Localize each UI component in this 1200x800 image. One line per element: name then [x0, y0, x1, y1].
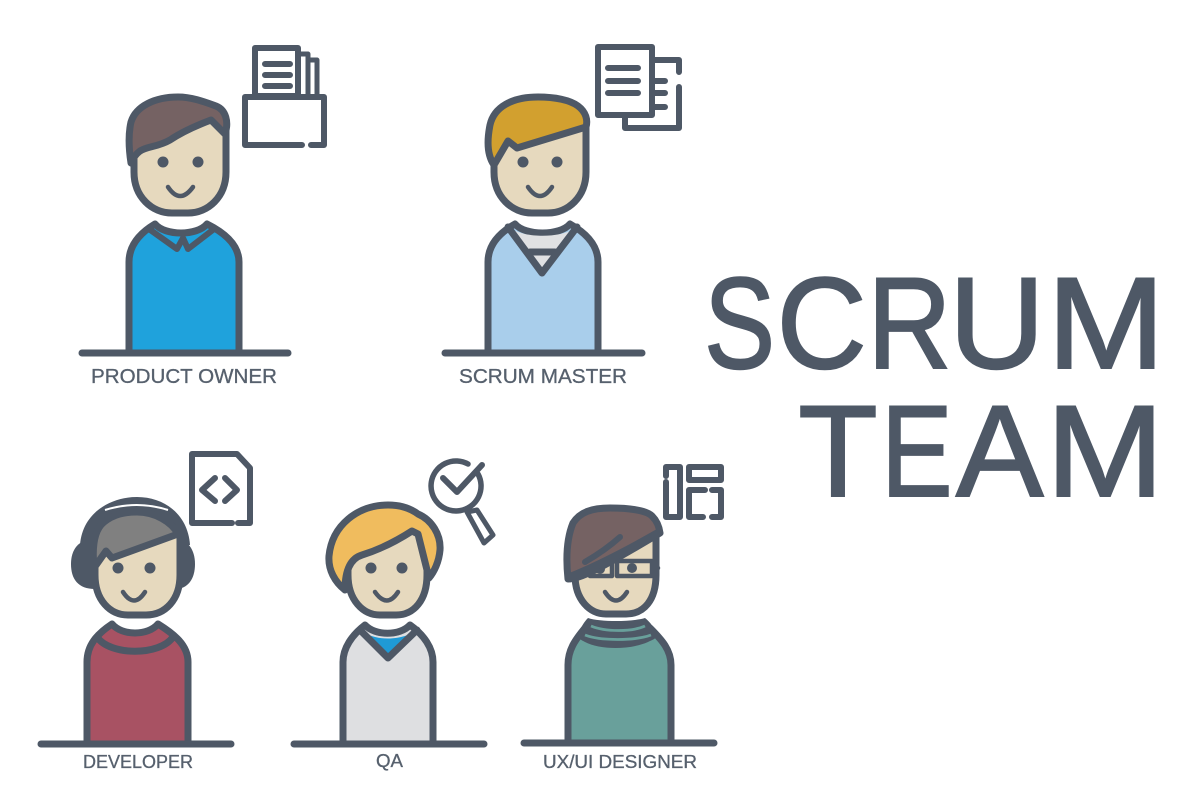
- title: SCRUM TEAM: A: [956, 378, 1044, 524]
- hair: [93, 512, 178, 568]
- desk line: [294, 740, 484, 748]
- desk line: [445, 350, 642, 356]
- title: SCRUM TEAM: R: [867, 250, 952, 396]
- v-neck: [360, 630, 417, 658]
- title: SCRUM TEAM: T: [798, 378, 878, 524]
- title: SCRUM TEAM: U: [949, 250, 1045, 396]
- glasses: [590, 561, 658, 576]
- title: SCRUM TEAM: S: [704, 250, 775, 396]
- panel: QA: [294, 461, 493, 771]
- turtleneck collar: [578, 618, 657, 648]
- smile: [605, 592, 627, 600]
- left eye: [595, 564, 605, 574]
- hair strand: [585, 537, 620, 562]
- body: red sweater: [87, 624, 188, 744]
- body: teal sweater: [568, 628, 671, 743]
- hair: [129, 97, 227, 163]
- hair: [488, 97, 587, 165]
- undershirt: [367, 634, 410, 655]
- icon: folder with documents: [245, 48, 324, 145]
- eyes: [518, 156, 562, 168]
- collar: [149, 229, 214, 249]
- panel: product owner: [82, 48, 324, 388]
- headphones: [71, 497, 195, 589]
- eyes: [112, 562, 156, 574]
- face: [95, 525, 180, 615]
- collar arc: [97, 637, 173, 651]
- icon: layout wireframe: [666, 467, 721, 517]
- label: PRODUCT OWNER: [91, 366, 277, 388]
- label: UX/UI DESIGNER: [543, 751, 697, 772]
- icon: documents: [598, 47, 679, 128]
- smile: [528, 187, 552, 196]
- label: DEVELOPER: [83, 751, 193, 772]
- desk line: [524, 740, 714, 746]
- hair: [329, 505, 440, 590]
- face: [348, 530, 427, 615]
- face: [575, 530, 656, 614]
- label: QA: [376, 750, 404, 771]
- desk line: [41, 740, 231, 748]
- label: SCRUM MASTER: [459, 366, 627, 388]
- eyes: [366, 562, 408, 574]
- panel: scrum master: [445, 47, 679, 388]
- undershirt: [512, 229, 574, 271]
- icon: magnifier with check: [431, 461, 493, 543]
- v-neck: [508, 227, 577, 273]
- smile: [168, 187, 193, 196]
- face: [134, 120, 226, 213]
- desk line: [82, 350, 288, 356]
- fringe edge: [570, 533, 658, 577]
- title: SCRUM TEAM: E: [881, 378, 952, 524]
- body: grey sweater: [343, 625, 433, 744]
- title: SCRUM TEAM: C: [777, 250, 867, 396]
- face: [494, 120, 586, 213]
- panel: UX/UI designer: [524, 467, 721, 772]
- smile: [123, 592, 145, 600]
- icon: code file: [192, 454, 250, 523]
- title: SCRUM TEAM: M: [1046, 378, 1164, 524]
- title: SCRUM TEAM: [704, 250, 1165, 524]
- body: blue sweater: [129, 224, 239, 353]
- hair: [567, 508, 660, 579]
- body: light blue sweater: [488, 224, 598, 353]
- panel: developer: [41, 454, 250, 772]
- collar stripes: [585, 626, 651, 640]
- eyes: [158, 156, 204, 168]
- smile: [375, 592, 398, 600]
- title: SCRUM TEAM: M: [1047, 250, 1165, 396]
- right eye: [627, 563, 637, 573]
